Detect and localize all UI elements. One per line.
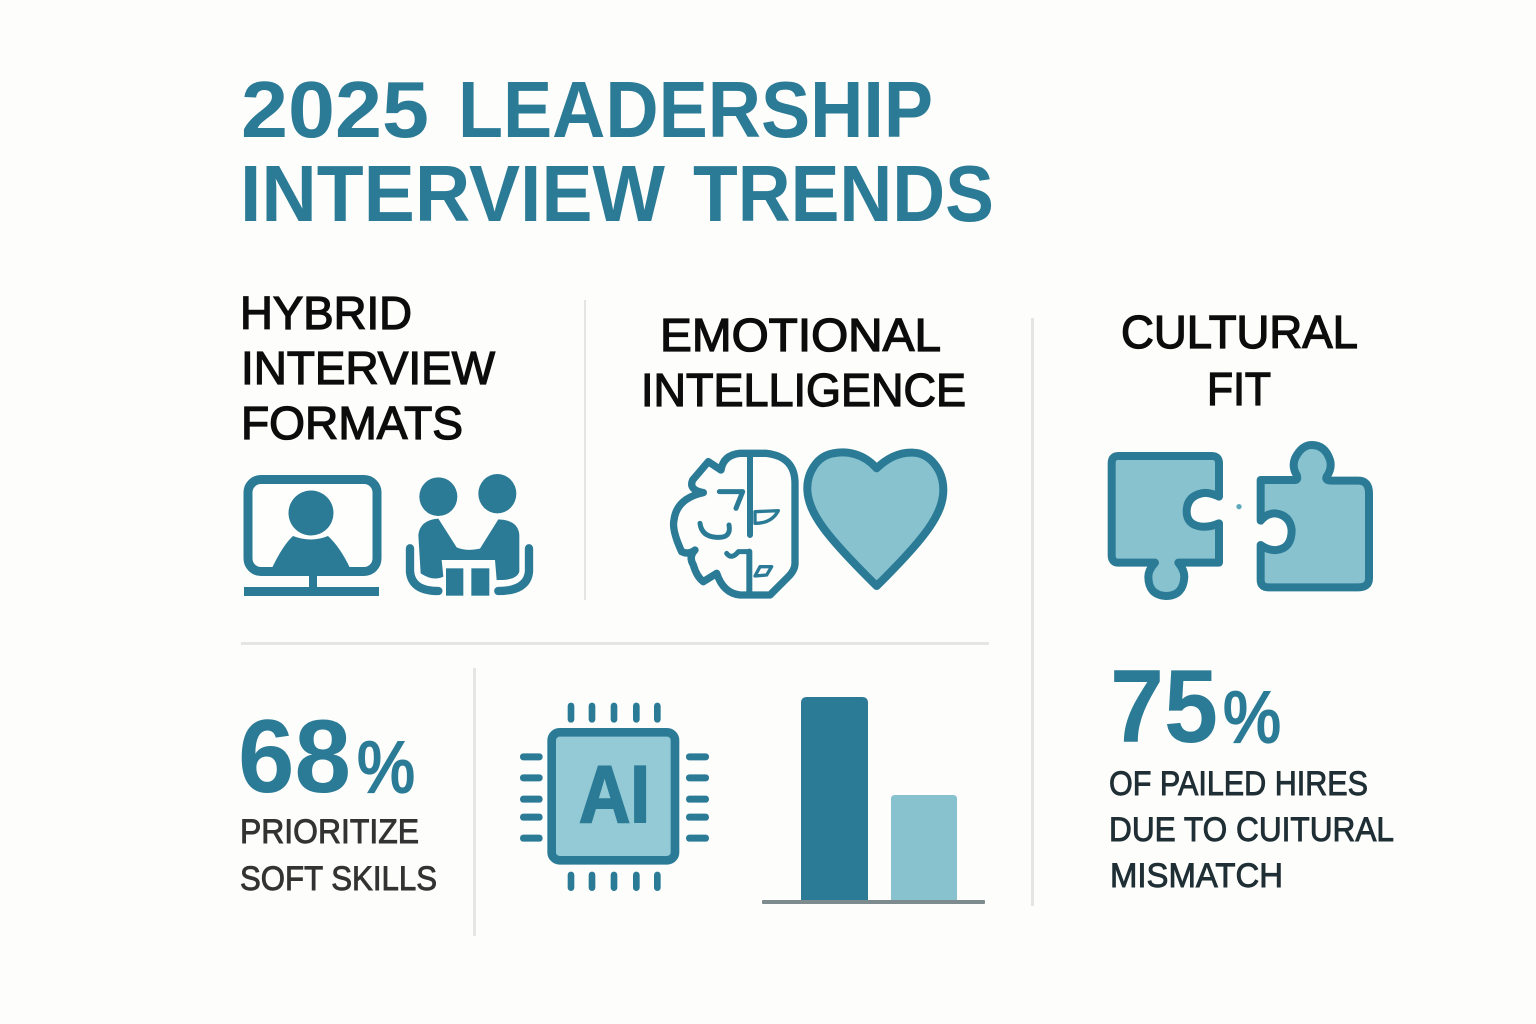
heading: cultural fit (1121, 306, 1358, 415)
icon: two people at a table (410, 474, 529, 596)
icon: AI chip: AI (579, 750, 650, 840)
number: 75% (1110, 649, 1281, 765)
heading: emotional intelligence: EMOTIONAL (660, 309, 941, 361)
label: of pailed hires due to cuitural mismatch (1109, 765, 1394, 895)
number: 68% (238, 699, 415, 815)
stat: 75% of failed hires (1109, 649, 1394, 895)
number: 68%: % (357, 728, 415, 808)
number: 75%: 75 (1110, 649, 1218, 765)
heading: hybrid interview formats: INTERVIEW (241, 342, 496, 394)
label: prioritize soft skills (240, 813, 437, 898)
label: prioritize soft skills: SOFT SKILLS (240, 860, 437, 898)
title: LEADERSHIP (458, 65, 933, 154)
heading: hybrid interview formats (240, 287, 496, 449)
title: 2025 (241, 65, 429, 154)
icon: AI chip (520, 703, 709, 891)
panel: hybrid interview formats (240, 287, 529, 596)
icon: heart (807, 452, 943, 586)
number: 75%: % (1223, 678, 1281, 758)
heading: hybrid interview formats: HYBRID (240, 287, 412, 339)
label: of pailed hires due to cuitural mismatch: OF PAILED HIRES (1109, 765, 1368, 803)
heading: emotional intelligence: INTELLIGENCE (641, 364, 966, 416)
label: prioritize soft skills: PRIORITIZE (240, 813, 419, 851)
heading: hybrid interview formats: FORMATS (241, 397, 463, 449)
heading: cultural fit: FIT (1207, 363, 1271, 415)
heading: emotional intelligence (641, 309, 966, 416)
icon: person on video monitor (244, 480, 379, 596)
label: of pailed hires due to cuitural mismatch: MISMATCH (1110, 857, 1283, 895)
title (240, 65, 994, 238)
label: of pailed hires due to cuitural mismatch: DUE TO CUITURAL (1109, 811, 1394, 849)
panel: cultural fit (1112, 306, 1369, 596)
heading: cultural fit: CULTURAL (1121, 306, 1358, 358)
bar chart (762, 697, 985, 904)
number: 68%: 68 (238, 699, 351, 815)
icon: brain (674, 453, 795, 595)
title: TRENDS (693, 149, 994, 238)
stat: 68% prioritize soft skills (238, 699, 437, 898)
icon: puzzle pieces (1112, 445, 1369, 596)
title: INTERVIEW (240, 149, 665, 238)
panel: emotional intelligence (641, 309, 966, 595)
